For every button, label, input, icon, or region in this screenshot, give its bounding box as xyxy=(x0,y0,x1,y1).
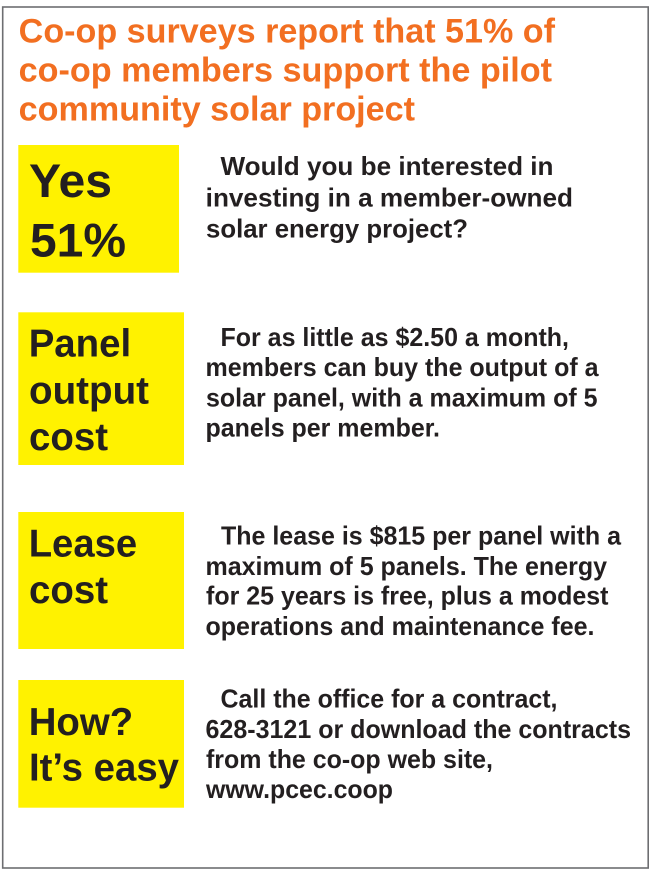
text: question: investing in a member-owned xyxy=(206,182,573,212)
text: lease description xyxy=(206,521,622,641)
text: panel output description: members can buy the output of a xyxy=(206,352,599,382)
title xyxy=(19,12,556,128)
text: question: solar energy project? xyxy=(206,214,468,244)
label: panel output cost: output xyxy=(29,369,149,412)
text: how description: Call the office for a contract, xyxy=(220,684,558,714)
label: yes 51%: Yes xyxy=(29,155,112,208)
text: lease description: operations and maintenance fee. xyxy=(206,611,594,641)
text: how description: www.pcec.coop xyxy=(205,774,393,804)
label: lease cost: cost xyxy=(29,569,108,612)
text: how description: from the co-op web site, xyxy=(206,744,493,774)
panel: panel output cost xyxy=(18,312,599,465)
yellow box: lease cost xyxy=(18,512,184,649)
title: co-op members support the pilot xyxy=(19,52,552,90)
yellow box: panel output cost xyxy=(18,312,184,465)
yellow box: yes xyxy=(18,145,179,273)
label: how it's easy xyxy=(29,701,180,790)
label: lease cost: Lease xyxy=(29,522,137,565)
label: panel output cost xyxy=(29,323,149,459)
title: community solar project xyxy=(19,90,415,128)
text: panel output description xyxy=(206,322,599,442)
label: yes 51%: 51% xyxy=(30,214,126,267)
text: lease description: maximum of 5 panels. The energy xyxy=(206,551,608,581)
panel: yes 51% xyxy=(18,145,573,273)
title: Co-op surveys report that 51% of xyxy=(19,12,556,50)
panel: lease cost xyxy=(18,512,622,649)
label: how it's easy: It’s easy xyxy=(29,747,180,790)
label: lease cost xyxy=(29,522,137,612)
text: how description: 628-3121 or download the contracts xyxy=(206,714,631,744)
label: how it's easy: How? xyxy=(29,701,133,744)
label: panel output cost: Panel xyxy=(29,323,131,366)
yellow box: how xyxy=(18,680,184,808)
text: how description xyxy=(205,684,631,804)
text: panel output description: panels per member. xyxy=(206,412,440,442)
text: question xyxy=(206,151,573,244)
text: panel output description: For as little as $2.50 a month, xyxy=(220,322,569,352)
panel: how xyxy=(18,680,631,808)
text: question: Would you be interested in xyxy=(220,151,554,181)
text: lease description: for 25 years is free, plus a modest xyxy=(206,581,609,611)
text: lease description: The lease is $815 per panel with a xyxy=(221,521,622,551)
text: panel output description: solar panel, with a maximum of 5 xyxy=(206,382,598,412)
label: panel output cost: cost xyxy=(29,416,108,459)
label: yes 51% xyxy=(29,155,126,267)
